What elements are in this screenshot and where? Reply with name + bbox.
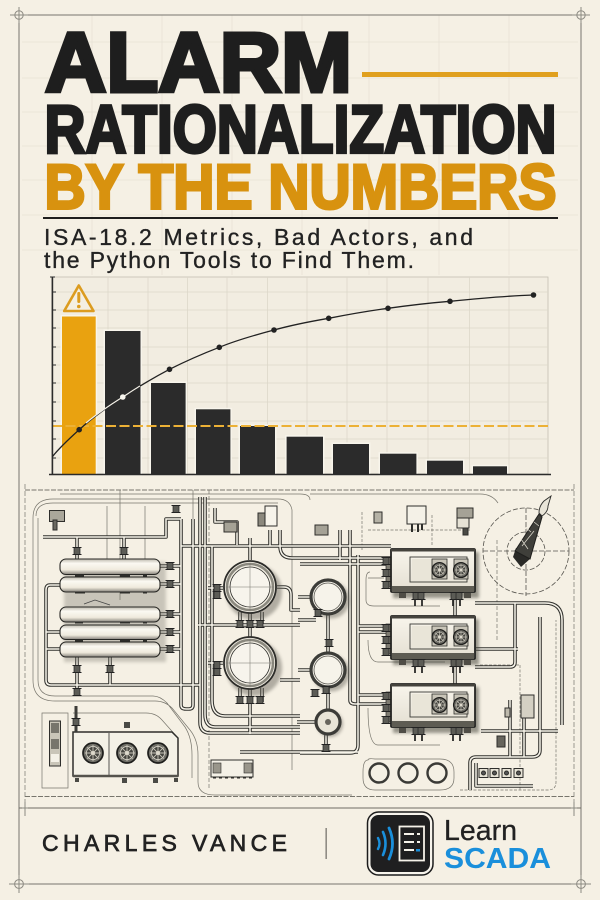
bars: [62, 316, 507, 474]
vessel 2: [60, 577, 160, 592]
bar 9: [427, 461, 463, 474]
title line: ALARM: ALARM: [45, 16, 352, 110]
bar 5: [240, 426, 275, 474]
author name: CHARLES VANCE: [42, 830, 287, 856]
bar 2: [105, 331, 140, 474]
terminal blocks: [479, 768, 523, 778]
drum 1: [224, 561, 276, 613]
logo wordmark: Learn: Learn: [444, 815, 517, 847]
logo wordmark: SCADA: SCADA: [444, 843, 551, 875]
subtitle line 1: ISA-18.2 Metrics, Bad Actors, and: [44, 224, 473, 250]
threshold dashed line: [52, 425, 548, 427]
bar 3: [151, 383, 186, 474]
heading rule: [43, 217, 558, 219]
equipment skid: [211, 760, 253, 778]
vessel 5: [60, 642, 160, 657]
pareto chart: [49, 277, 551, 474]
orange accent bar: [362, 72, 558, 77]
compressor unit 2: [382, 616, 479, 673]
flare radius circles: [483, 508, 569, 596]
title line: BY THE NUMBERS: BY THE NUMBERS: [44, 152, 556, 222]
small drum 2: [311, 653, 345, 687]
process plant schematic: [25, 484, 574, 802]
small drum 3: [316, 710, 340, 734]
bar 10: [473, 466, 507, 474]
small drum 1: [311, 580, 345, 614]
drum 2: [224, 637, 276, 689]
piping network: [43, 497, 562, 790]
vessel 3: [60, 607, 160, 622]
vessel 4: [60, 625, 160, 640]
title: [44, 16, 556, 222]
icon: warning triangle: [64, 286, 94, 311]
bar 7: [333, 444, 369, 474]
chart grid: [52, 277, 548, 474]
cumulative curve: [52, 295, 534, 457]
flare tower: [513, 548, 531, 567]
large separator drums: [212, 561, 282, 704]
axes: [49, 277, 551, 474]
icon: app tile: [368, 812, 433, 875]
heat exchanger vessels: [60, 506, 180, 696]
subtitle line 2: the Python Tools to Find Them.: [44, 247, 414, 273]
instrument boxes: [50, 506, 534, 747]
drum shadow: [226, 564, 282, 620]
chart panel: [52, 277, 548, 474]
cooler fans: [83, 743, 103, 763]
small drums: [310, 580, 350, 752]
logo: Learn SCADA: [368, 812, 551, 875]
cooler feet and top fitting: [75, 722, 178, 783]
compressor unit 1: [382, 549, 479, 606]
vessel shadow: [64, 562, 166, 662]
compressor unit 3: [382, 684, 479, 741]
bar 6: [287, 437, 323, 474]
control cabinet stack: [50, 721, 60, 766]
footer divider: [326, 828, 327, 859]
icon: server document: [400, 826, 424, 860]
bar 8: [380, 454, 416, 474]
subtitle: [44, 224, 473, 273]
bar 1: highlighted: [62, 316, 96, 474]
flare flame: [539, 496, 551, 516]
drum shadow: [226, 640, 282, 696]
icon: signal arcs: [378, 828, 392, 859]
bar 4: [196, 409, 230, 474]
flare stack: [513, 496, 551, 567]
cooler housing: [73, 732, 178, 776]
schematic guide lines: [25, 484, 574, 802]
vessel 1: [60, 559, 160, 574]
storage rings: [370, 764, 446, 782]
curve data points: [76, 292, 536, 433]
faint page grid: [22, 15, 578, 275]
air cooler: [72, 706, 178, 783]
